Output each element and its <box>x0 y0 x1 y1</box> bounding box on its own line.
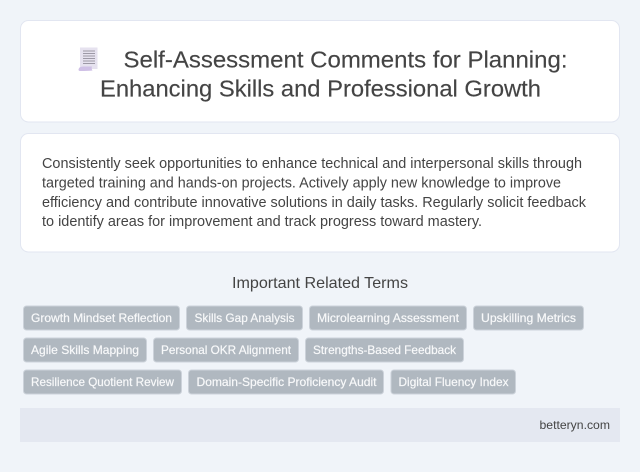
title: Self-Assessment Comments for Planning: <box>124 46 568 72</box>
tag: Digital Fluency Index: Digital Fluency Index <box>398 375 508 389</box>
tag: Growth Mindset Reflection <box>24 306 180 330</box>
tag: Agile Skills Mapping <box>24 338 146 362</box>
tag: Personal OKR Alignment: Personal OKR Alignment <box>161 343 292 357</box>
tag: Resilience Quotient Review: Resilience Quotient Review <box>31 375 174 389</box>
tag: Skills Gap Analysis <box>186 306 302 330</box>
summary paragraph: Consistently seek opportunities to enhance technical and interpersonal skills through <box>42 156 582 172</box>
tag: Digital Fluency Index <box>391 370 516 394</box>
heading: related terms: Important Related Terms <box>232 275 408 292</box>
tag: Upskilling Metrics: Upskilling Metrics <box>481 311 576 325</box>
tag: Strengths-Based Feedback <box>306 338 464 362</box>
title <box>100 46 568 102</box>
tag: Growth Mindset Reflection: Growth Mindset Reflection <box>31 311 172 325</box>
summary paragraph: efficiency and contribute innovative solutions in daily tasks. Regularly solicit feedback <box>42 195 587 211</box>
panel: summary card <box>20 134 620 252</box>
tag: Upskilling Metrics <box>474 306 584 330</box>
tag: Microlearning Assessment: Microlearning Assessment <box>317 311 460 325</box>
tag: Resilience Quotient Review <box>24 370 182 394</box>
summary paragraph <box>42 156 587 230</box>
footer bar <box>20 408 620 442</box>
title: Enhancing Skills and Professional Growth <box>100 76 541 102</box>
tag: Agile Skills Mapping: Agile Skills Mapping <box>31 343 139 357</box>
tag: Domain-Specific Proficiency Audit <box>188 370 384 394</box>
summary paragraph: to identify areas for improvement and track progress toward mastery. <box>42 214 482 230</box>
tag: Personal OKR Alignment <box>154 338 298 362</box>
tag: Strengths-Based Feedback: Strengths-Based Feedback <box>313 343 457 357</box>
tag: Domain-Specific Proficiency Audit: Domain-Specific Proficiency Audit <box>196 375 377 389</box>
panel: title card <box>20 20 620 122</box>
footer site name: betteryn.com <box>540 418 610 432</box>
tag list <box>24 306 584 394</box>
summary paragraph: targeted training and hands-on projects. Actively apply new knowledge to improve <box>42 176 561 192</box>
icon: scroll document <box>78 48 98 71</box>
tag: Microlearning Assessment <box>310 306 466 330</box>
tag: Skills Gap Analysis: Skills Gap Analysis <box>194 311 294 325</box>
